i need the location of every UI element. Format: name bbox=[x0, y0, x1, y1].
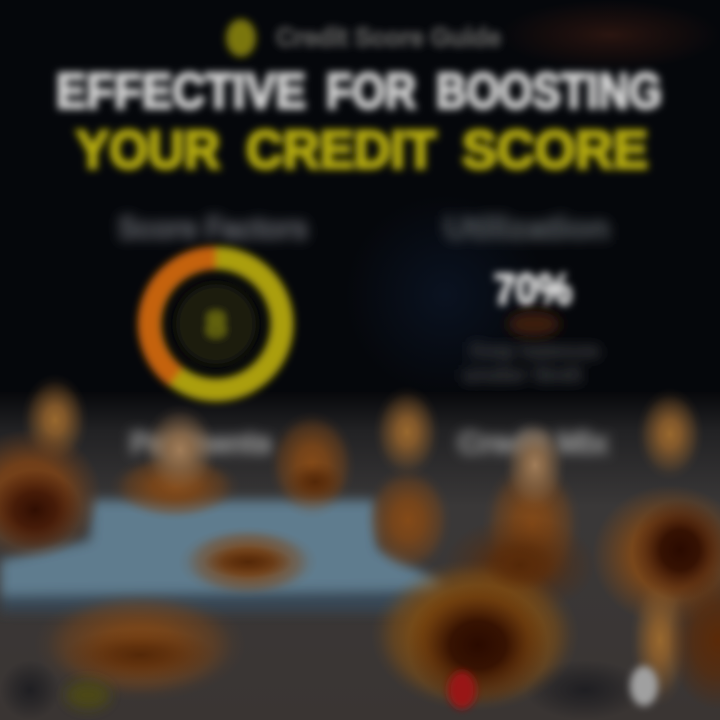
donut chart bbox=[149, 258, 282, 390]
title: EFFECTIVE bbox=[56, 63, 306, 119]
title: SCORE bbox=[462, 120, 648, 180]
statistic: 70% bbox=[494, 265, 572, 314]
left heading: Score Factors bbox=[118, 210, 308, 246]
stat description bbox=[462, 338, 600, 387]
panel: blue table bbox=[0, 500, 445, 612]
title: FOR bbox=[326, 63, 416, 119]
stat description: Keep balances bbox=[470, 338, 600, 363]
title: BOOSTING bbox=[436, 63, 662, 119]
lower right caption: Credit Mix bbox=[458, 427, 608, 460]
icon: red badge bbox=[448, 671, 476, 709]
icon: logo bbox=[226, 19, 256, 57]
title: YOUR bbox=[76, 120, 220, 180]
soft figures bbox=[0, 374, 720, 711]
lower scene: table and figures bbox=[0, 374, 720, 711]
stat description: under limit bbox=[462, 362, 583, 387]
title: CREDIT bbox=[246, 120, 436, 180]
title bbox=[56, 63, 662, 180]
donut chart: 8 bbox=[207, 306, 225, 344]
dark centres bbox=[0, 462, 720, 705]
right heading: Utilization bbox=[444, 210, 610, 246]
lower left caption: Payments bbox=[130, 427, 272, 460]
icon: white badge bbox=[630, 666, 658, 706]
stat icon bbox=[508, 311, 560, 337]
icon: yellow badge bbox=[66, 681, 110, 709]
header caption: Credit Score Guide bbox=[276, 22, 501, 52]
